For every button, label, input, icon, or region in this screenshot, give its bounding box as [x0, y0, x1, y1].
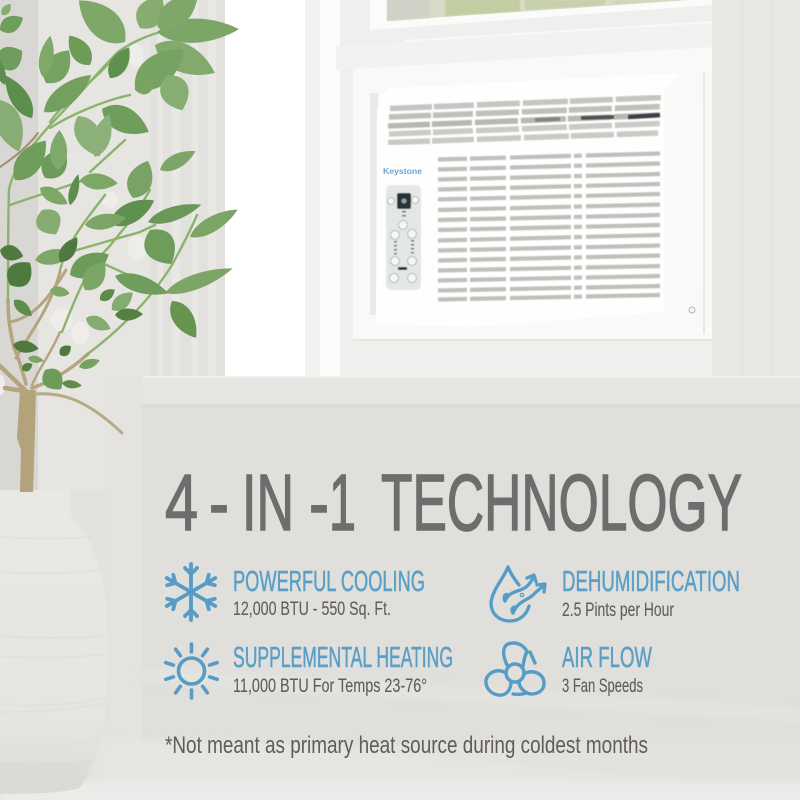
- white fruits: [0, 44, 147, 395]
- detail: 3 Fan Speeds: [562, 676, 643, 697]
- detail: 11,000 BTU For Temps 23-76°: [233, 676, 427, 697]
- heading: POWERFUL COOLING: [233, 566, 425, 598]
- unit body: [376, 73, 699, 327]
- control panel: [386, 185, 421, 290]
- power cord port: [689, 307, 695, 313]
- front grille louvers: [438, 154, 660, 300]
- top vent louvers: [388, 98, 662, 142]
- icon: sun: [166, 644, 217, 698]
- window sill: [143, 376, 800, 406]
- detail: 12,000 BTU - 550 Sq. Ft.: [233, 599, 391, 620]
- window glass with outdoor view: [336, 0, 712, 70]
- lower wall: [141, 404, 800, 744]
- icon: snowflake: [164, 564, 218, 620]
- brand logo: Keystone: [383, 166, 422, 176]
- floor: [0, 740, 800, 800]
- title: -: [209, 458, 229, 547]
- detail: 2.5 Pints per Hour: [562, 600, 674, 621]
- plant: [0, 0, 241, 492]
- feature: powerful cooling: [164, 564, 425, 620]
- feature: air flow: [486, 642, 652, 697]
- title: -: [309, 458, 329, 547]
- air conditioner unit: [376, 73, 699, 327]
- feature: supplemental heating: [166, 642, 453, 698]
- trunk and branches: [0, 133, 122, 492]
- leaves: [0, 0, 241, 396]
- title: 1: [329, 458, 356, 547]
- air conditioner mounting frame: [353, 47, 712, 340]
- green stems: [8, 31, 197, 356]
- heading: SUPPLEMENTAL HEATING: [233, 642, 453, 674]
- title: 4: [165, 458, 198, 547]
- feature: dehumidification: [491, 566, 740, 621]
- vase: [0, 490, 108, 794]
- title: IN: [242, 458, 294, 547]
- heading: AIR FLOW: [562, 642, 652, 674]
- icon: water drop with arrows: [491, 567, 545, 621]
- icon: fan: [486, 643, 544, 695]
- footnote: *Not meant as primary heat source during coldest months: [165, 732, 648, 759]
- title: [165, 458, 742, 547]
